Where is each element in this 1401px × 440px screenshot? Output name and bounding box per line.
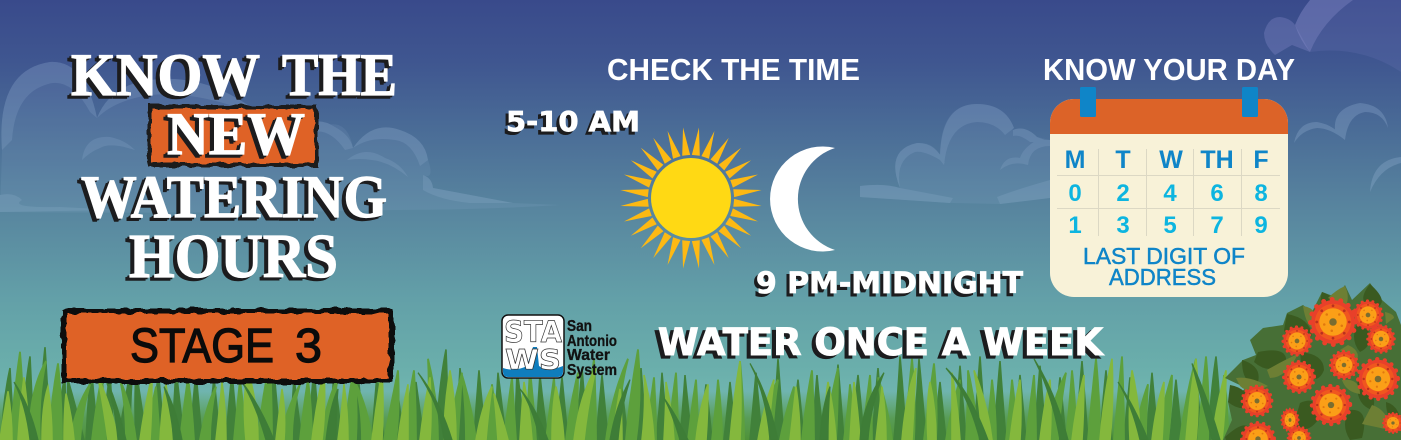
- logo wordmark: [567, 318, 617, 379]
- calendar caption: LAST DIGIT OF: [1083, 243, 1245, 269]
- icon: crescent moon: [770, 146, 835, 252]
- clouds: left group: [0, 62, 560, 213]
- address digits: 2: [1116, 180, 1130, 207]
- title line: KNOW THE: THE: [282, 42, 397, 108]
- logo wordmark: Water: [567, 347, 610, 364]
- title line: NEW: NEW: [167, 101, 305, 167]
- title line: HOURS: HOURS: [127, 224, 336, 292]
- title line: NEW: NEW: [165, 102, 303, 168]
- weekday labels: W: [1159, 146, 1183, 174]
- calendar page: [1050, 99, 1288, 297]
- stage badge: STAGE: [130, 320, 274, 373]
- orange badge behind NEW: [149, 107, 316, 165]
- title line: WATERING: WATERING: [81, 164, 387, 230]
- stage badge: 3: [295, 320, 322, 373]
- weekday labels: F: [1253, 146, 1269, 174]
- weekday labels: T: [1115, 146, 1131, 174]
- address digits: 7: [1210, 212, 1224, 239]
- logo wordmark: System: [567, 362, 617, 379]
- title line: KNOW THE: THE: [280, 44, 395, 110]
- logo mark: [502, 315, 564, 378]
- address digits: 9: [1254, 212, 1268, 239]
- logo mark: WS: [505, 343, 561, 376]
- weekday labels: [1065, 146, 1269, 174]
- clouds: top right: [1264, 0, 1401, 72]
- morning hours label: 5-10 AM: [503, 108, 637, 141]
- morning hours label: 5-10 AM: [506, 105, 640, 138]
- logo wordmark: San: [567, 318, 592, 335]
- address digits: 6: [1210, 180, 1224, 207]
- weekday labels: TH: [1200, 146, 1234, 174]
- title line: WATERING: WATERING: [79, 166, 385, 232]
- bush foliage: [1223, 283, 1401, 440]
- title line: KNOW THE: KNOW: [67, 45, 256, 111]
- bush with flowers: [1223, 283, 1401, 440]
- title line: WATERING: WATERING: [77, 167, 383, 233]
- night hours label: 9 PM-MIDNIGHT: [756, 266, 1023, 300]
- calendar header: [1050, 99, 1288, 134]
- grass: [0, 347, 1240, 440]
- title line: HOURS: HOURS: [125, 226, 334, 294]
- weekday labels: M: [1065, 146, 1085, 174]
- calendar grid: [1057, 149, 1280, 236]
- frequency message: WATER ONCE A WEEK: [654, 324, 1100, 367]
- title line: NEW: NEW: [163, 104, 301, 170]
- address digits: 5: [1163, 212, 1177, 239]
- address digits: 4: [1163, 180, 1177, 207]
- calendar: [1050, 87, 1288, 297]
- clouds: right group: [860, 103, 1401, 204]
- title block: [67, 42, 397, 294]
- calendar caption: [1083, 243, 1245, 290]
- calendar caption: ADDRESS: [1109, 264, 1216, 290]
- night hours label: 9 PM-MIDNIGHT: [753, 269, 1020, 303]
- title line: KNOW THE: THE: [278, 45, 393, 111]
- address digits: 3: [1116, 212, 1130, 239]
- title line: HOURS: HOURS: [129, 223, 338, 291]
- address digits: 1: [1068, 212, 1082, 239]
- icon: sun: [620, 127, 762, 269]
- logo wordmark: Antonio: [567, 333, 617, 350]
- stage badge: [64, 311, 391, 381]
- heading: check the time: CHECK THE TIME: [607, 52, 860, 87]
- heading: know your day: KNOW YOUR DAY: [1043, 52, 1295, 87]
- frequency message: WATER ONCE A WEEK: [658, 321, 1104, 364]
- title line: KNOW THE: [67, 42, 397, 111]
- title line: KNOW THE: KNOW: [69, 44, 258, 110]
- address digits: 8: [1254, 180, 1268, 207]
- address digits: 0: [1068, 180, 1082, 207]
- flower cluster: [1242, 300, 1401, 440]
- logo mark: STA: [504, 315, 563, 349]
- SAWS logo: [502, 315, 617, 379]
- calendar binder tabs: [1080, 87, 1258, 117]
- title line: KNOW THE: KNOW: [71, 42, 260, 108]
- address digits: [1068, 180, 1268, 239]
